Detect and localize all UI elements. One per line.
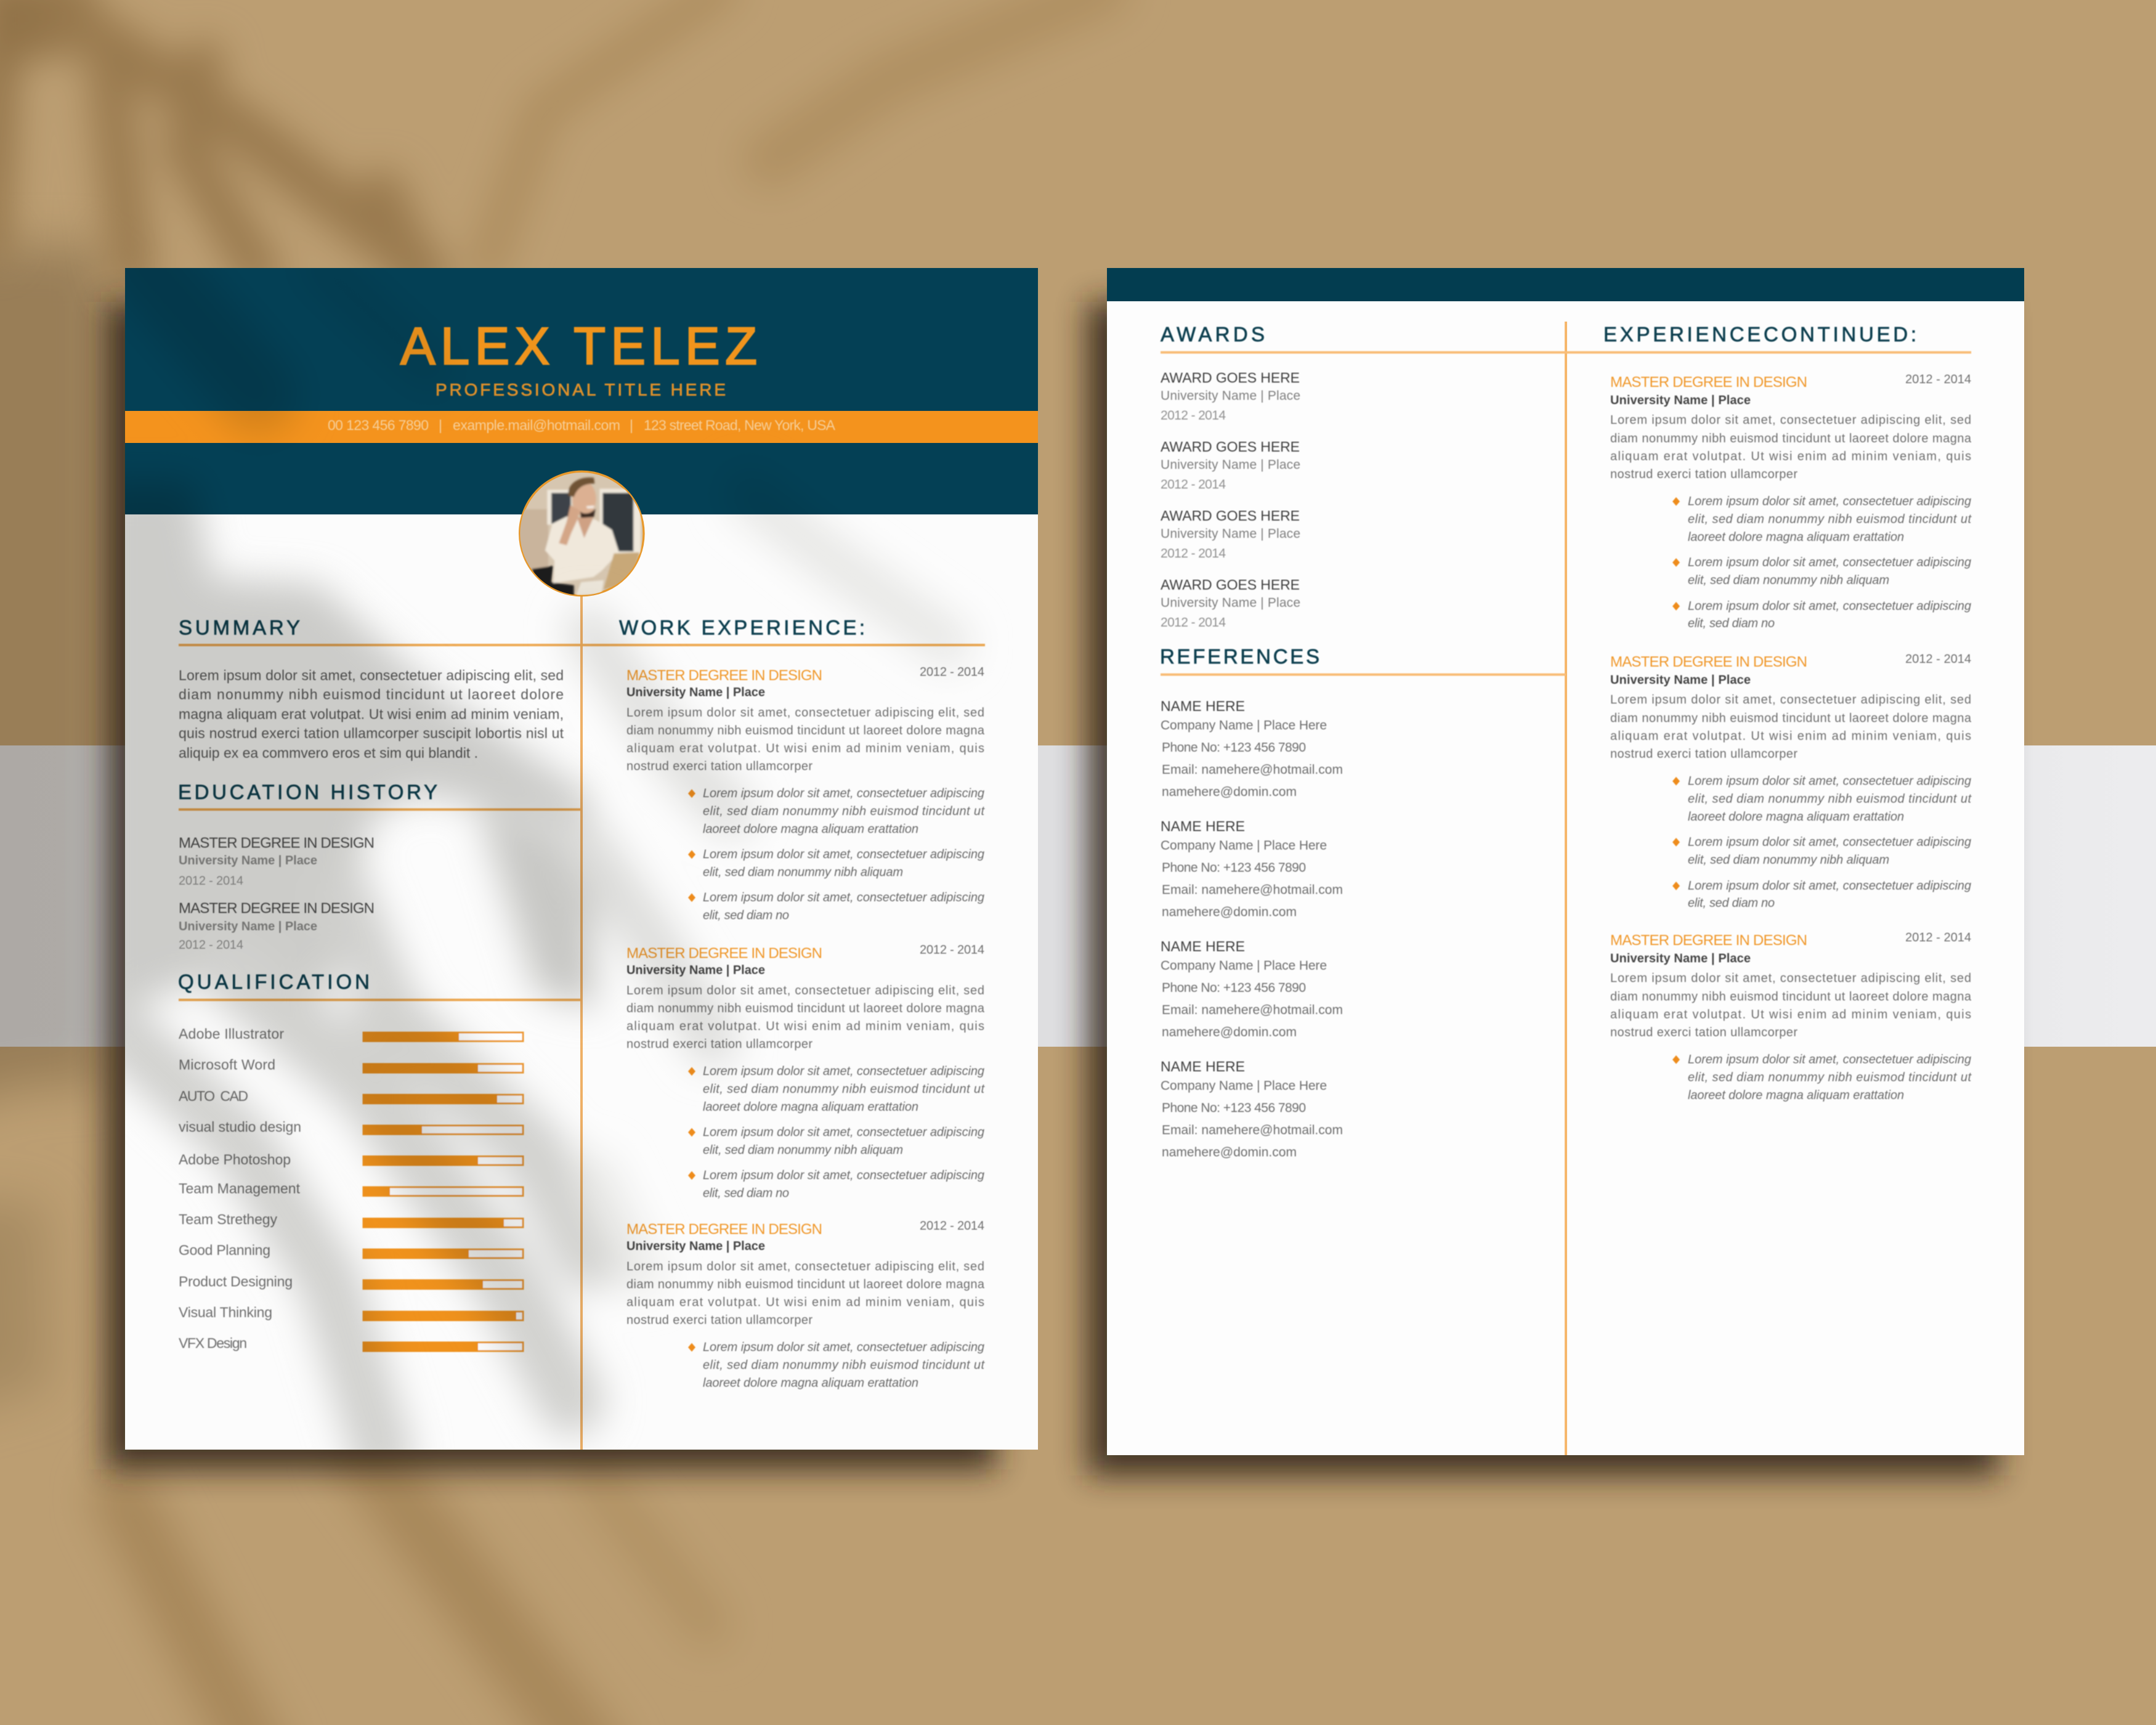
resume page 1: [125, 268, 1038, 1450]
continued job entry 1: aliquam erat volutpat. Ut wisi enim ad minim veniam, quis: [1610, 450, 1971, 463]
page 2 centre divider: [1565, 322, 1567, 1455]
job entry 3: nostrud exerci tation ullamcorper: [626, 1313, 813, 1327]
reference 3: Company Name | Place Here: [1161, 959, 1327, 973]
rule under qualification: [179, 999, 582, 1001]
continued job entry 1: diam nonummy nibh euismod tincidunt ut laoreet dolore magna: [1610, 432, 1972, 445]
award entry 4: [1161, 577, 1300, 630]
reference 2: [1161, 818, 1343, 919]
reference 1: NAME HERE: [1161, 698, 1245, 714]
reference 4: namehere@domin.com: [1162, 1145, 1297, 1159]
skill labels: Good Planning: [179, 1242, 270, 1258]
continued job entry 3: aliquam erat volutpat. Ut wisi enim ad minim veniam, quis: [1610, 1008, 1971, 1021]
continued job entry 2: elit, sed diam nonummy nibh aliquam: [1688, 853, 1889, 867]
name title: ALEX TELEZ: [400, 317, 757, 376]
heading: awards: AWARDS: [1161, 323, 1265, 346]
reference 3: namehere@domin.com: [1162, 1025, 1297, 1039]
job entry 2: diam nonummy nibh euismod tincidunt ut laoreet dolore magna: [626, 1002, 985, 1015]
job entry 3: University Name | Place: [626, 1240, 765, 1253]
reference 3: NAME HERE: [1161, 938, 1245, 954]
continued job entry 3: diam nonummy nibh euismod tincidunt ut laoreet dolore magna: [1610, 990, 1972, 1004]
continued job entry 3: University Name | Place: [1610, 952, 1751, 965]
reference 2: Phone No: +123 456 7890: [1162, 861, 1306, 875]
continued job entry 2: nostrud exerci tation ullamcorper: [1610, 747, 1797, 761]
contact details: 00 123 456 7890: [328, 417, 429, 433]
reference 1: namehere@domin.com: [1162, 785, 1297, 799]
job entry 2: elit, sed diam nonummy nibh aliquam: [703, 1143, 903, 1157]
summary text: diam nonummy nibh euismod tincidunt ut laoreet dolore: [179, 686, 564, 702]
skill labels: visual studio design: [179, 1119, 301, 1135]
job entry 2: aliquam erat volutpat. Ut wisi enim ad minim veniam, quis: [626, 1020, 984, 1033]
award entry 1: AWARD GOES HERE: [1161, 370, 1300, 386]
award entry 2: AWARD GOES HERE: [1161, 439, 1300, 455]
award entry 3: AWARD GOES HERE: [1161, 508, 1300, 524]
job entry 1: elit, sed diam no: [703, 909, 789, 922]
reference 4: Company Name | Place Here: [1161, 1079, 1327, 1093]
resume page 2: [1107, 268, 2024, 1455]
continued job entry 3: Lorem ipsum dolor sit amet, consectetuer adipiscing elit, sed: [1610, 972, 1971, 985]
job entry 1: Lorem ipsum dolor sit amet, consectetuer adipiscing: [703, 891, 984, 904]
page 1 navy header: [125, 268, 1038, 514]
job entry 3: [626, 1219, 985, 1390]
page 2 navy header strip: [1107, 268, 2024, 301]
drop shadow: right page: [1087, 302, 1999, 1475]
award entry 4: 2012 - 2014: [1161, 615, 1226, 630]
skill labels: Team Strethegy: [179, 1211, 277, 1227]
continued job entry 2: diam nonummy nibh euismod tincidunt ut laoreet dolore magna: [1610, 712, 1972, 725]
job entry 2: 2012 - 2014: [920, 943, 984, 957]
heading: summary: SUMMARY: [179, 616, 300, 639]
education entries: 2012 - 2014: [179, 938, 243, 952]
job entry 1: nostrud exerci tation ullamcorper: [626, 760, 813, 773]
award entry 3: University Name | Place: [1161, 527, 1300, 541]
job entry 2: laoreet dolore magna aliquam erattation: [703, 1100, 918, 1114]
reference 1: [1161, 698, 1343, 799]
job entry 1: MASTER DEGREE IN DESIGN: [626, 667, 822, 684]
continued job entry 3: MASTER DEGREE IN DESIGN: [1610, 932, 1807, 949]
continued job entry 3: elit, sed diam nonummy nibh euismod tincidunt ut: [1688, 1071, 1972, 1084]
skill labels: Adobe Illustrator: [179, 1026, 284, 1042]
reference 3: Phone No: +123 456 7890: [1162, 981, 1306, 995]
leaf shadows falling across the pages: [94, 259, 949, 1454]
profile photo: [517, 471, 644, 598]
contact details: |: [439, 417, 442, 433]
job entry 2: Lorem ipsum dolor sit amet, consectetuer adipiscing elit, sed: [626, 984, 984, 997]
rule under references: [1161, 673, 1566, 676]
award entry 3: 2012 - 2014: [1161, 546, 1226, 561]
reference 1: Email: namehere@hotmail.com: [1162, 763, 1343, 777]
contact details: 123 street Road, New York, USA: [644, 417, 836, 433]
continued job entry 1: Lorem ipsum dolor sit amet, consectetuer adipiscing: [1688, 599, 1971, 613]
continued job entry 3: Lorem ipsum dolor sit amet, consectetuer adipiscing: [1688, 1053, 1971, 1066]
job entry 3: elit, sed diam nonummy nibh euismod tincidunt ut: [703, 1358, 985, 1372]
skill labels: Product Designing: [179, 1273, 293, 1289]
job entry 1: [626, 665, 985, 922]
award entry 4: University Name | Place: [1161, 596, 1300, 610]
continued job entry 2: laoreet dolore magna aliquam erattation: [1688, 810, 1904, 824]
reference 2: Email: namehere@hotmail.com: [1162, 883, 1343, 897]
job entry 2: Lorem ipsum dolor sit amet, consectetuer adipiscing: [703, 1169, 984, 1182]
reference 4: Phone No: +123 456 7890: [1162, 1101, 1306, 1115]
continued job entry 2: Lorem ipsum dolor sit amet, consectetuer adipiscing: [1688, 774, 1971, 788]
summary text: [179, 667, 564, 761]
job entry 3: diam nonummy nibh euismod tincidunt ut laoreet dolore magna: [626, 1278, 985, 1291]
job entry 1: Lorem ipsum dolor sit amet, consectetuer adipiscing elit, sed: [626, 706, 984, 720]
continued job entry 2: elit, sed diam no: [1688, 896, 1775, 910]
reference 1: Phone No: +123 456 7890: [1162, 741, 1306, 755]
job entry 2: nostrud exerci tation ullamcorper: [626, 1037, 813, 1051]
skill bars chart: [363, 1032, 523, 1352]
skill labels: Adobe Photoshop: [179, 1151, 291, 1167]
leaf shadows on background: [0, 0, 1103, 1725]
professional title: PROFESSIONAL TITLE HERE: [436, 380, 726, 399]
heading: experience continued: EXPERIENCECONTINUED:: [1603, 323, 1916, 346]
continued job entry 2: Lorem ipsum dolor sit amet, consectetuer adipiscing: [1688, 835, 1971, 849]
award entry 2: 2012 - 2014: [1161, 477, 1226, 492]
reference 3: Email: namehere@hotmail.com: [1162, 1003, 1343, 1017]
page 2 paper: [1107, 268, 2024, 1455]
award entry 4: AWARD GOES HERE: [1161, 577, 1300, 593]
education entries: University Name | Place: [179, 920, 317, 933]
job entry 2: Lorem ipsum dolor sit amet, consectetuer adipiscing: [703, 1065, 984, 1078]
job entry 1: diam nonummy nibh euismod tincidunt ut laoreet dolore magna: [626, 724, 985, 737]
skill labels: Visual Thinking: [179, 1304, 272, 1320]
rule under summary and work experience: [179, 644, 985, 646]
job entry 1: elit, sed diam nonummy nibh euismod tincidunt ut: [703, 805, 985, 818]
continued job entry 1: University Name | Place: [1610, 394, 1751, 407]
continued job entry 3: laoreet dolore magna aliquam erattation: [1688, 1089, 1904, 1102]
summary text: Lorem ipsum dolor sit amet, consectetuer adipiscing elit, sed: [179, 667, 564, 683]
education entries: 2012 - 2014: [179, 874, 243, 888]
continued job entry 1: 2012 - 2014: [1905, 373, 1971, 386]
reference 3: [1161, 938, 1343, 1039]
skill labels: Team Management: [179, 1180, 301, 1196]
rule under awards and experience: [1161, 351, 1971, 354]
job entry 1: University Name | Place: [626, 686, 765, 699]
education entries: [179, 835, 375, 952]
contact details: [328, 417, 836, 433]
page 2 text contents: [1160, 323, 1972, 1159]
summary text: aliquip ex ea commvero eros et sim qui blandit .: [179, 745, 478, 761]
education entries: University Name | Place: [179, 854, 317, 867]
award entry 2: [1161, 439, 1300, 492]
continued job entry 3: 2012 - 2014: [1905, 931, 1971, 944]
job entry 1: Lorem ipsum dolor sit amet, consectetuer adipiscing: [703, 787, 984, 800]
job entry 1: Lorem ipsum dolor sit amet, consectetuer adipiscing: [703, 848, 984, 861]
job entry 2: Lorem ipsum dolor sit amet, consectetuer adipiscing: [703, 1126, 984, 1139]
education entries: MASTER DEGREE IN DESIGN: [179, 900, 375, 917]
heading: work experience: WORK EXPERIENCE:: [619, 616, 865, 639]
heading: education history: EDUCATION HISTORY: [178, 781, 437, 803]
contact details: |: [630, 417, 633, 433]
contact details: example.mail@hotmail.com: [453, 417, 620, 433]
award entry 1: [1161, 370, 1300, 423]
continued job entry 2: MASTER DEGREE IN DESIGN: [1610, 654, 1807, 670]
continued job entry 2: Lorem ipsum dolor sit amet, consectetuer adipiscing elit, sed: [1610, 693, 1971, 707]
page 1 centre divider: [580, 591, 583, 1450]
white horizontal band behind pages: [0, 745, 2156, 1047]
job entry 2: University Name | Place: [626, 964, 765, 977]
continued job entry 1: elit, sed diam nonummy nibh euismod tincidunt ut: [1688, 513, 1972, 526]
continued job entry 1: elit, sed diam nonummy nibh aliquam: [1688, 574, 1889, 587]
skill labels: AUTO CAD: [179, 1088, 248, 1104]
continued job entry 1: Lorem ipsum dolor sit amet, consectetuer adipiscing elit, sed: [1610, 413, 1971, 427]
continued job entry 1: nostrud exerci tation ullamcorper: [1610, 468, 1797, 481]
job entry 3: MASTER DEGREE IN DESIGN: [626, 1221, 822, 1238]
continued job entry 1: [1610, 373, 1972, 630]
summary text: quis nostrud exerci tation ullamcorper suscipit lobortis nisl ut: [179, 725, 564, 741]
continued job entry 1: MASTER DEGREE IN DESIGN: [1610, 374, 1807, 391]
job entry 1: elit, sed diam nonummy nibh aliquam: [703, 866, 903, 879]
skill labels: VFX Design: [179, 1335, 247, 1351]
skill labels: [179, 1026, 301, 1351]
orange contact bar: [125, 411, 1038, 443]
continued job entry 2: [1610, 652, 1972, 910]
continued job entry 3: nostrud exerci tation ullamcorper: [1610, 1026, 1797, 1039]
continued job entry 3: [1610, 931, 1972, 1102]
continued job entry 1: Lorem ipsum dolor sit amet, consectetuer adipiscing: [1688, 556, 1971, 569]
job entry 3: 2012 - 2014: [920, 1219, 984, 1233]
job entry 3: aliquam erat volutpat. Ut wisi enim ad minim veniam, quis: [626, 1296, 984, 1309]
page 1 paper: [125, 268, 1038, 1450]
continued job entry 1: elit, sed diam no: [1688, 617, 1775, 630]
job entry 3: Lorem ipsum dolor sit amet, consectetuer adipiscing: [703, 1341, 984, 1354]
reference 4: NAME HERE: [1161, 1058, 1245, 1074]
skill labels: Microsoft Word: [179, 1057, 275, 1073]
job entry 2: MASTER DEGREE IN DESIGN: [626, 945, 822, 962]
drop shadow: left page: [106, 302, 996, 1469]
award entry 2: University Name | Place: [1161, 458, 1300, 472]
award entry 1: 2012 - 2014: [1161, 408, 1226, 423]
continued job entry 2: Lorem ipsum dolor sit amet, consectetuer adipiscing: [1688, 879, 1971, 893]
job entry 2: elit, sed diam nonummy nibh euismod tincidunt ut: [703, 1082, 985, 1096]
reference 1: Company Name | Place Here: [1161, 718, 1327, 733]
heading: qualification: QUALIFICATION: [178, 970, 370, 993]
job entry 2: [626, 943, 985, 1200]
summary text: magna aliquam erat volutpat. Ut wisi enim ad minim veniam,: [179, 706, 564, 722]
continued job entry 2: University Name | Place: [1610, 673, 1751, 687]
job entry 2: elit, sed diam no: [703, 1187, 789, 1200]
reference 4: [1161, 1058, 1343, 1159]
continued job entry 2: aliquam erat volutpat. Ut wisi enim ad minim veniam, quis: [1610, 729, 1971, 743]
job entry 1: 2012 - 2014: [920, 665, 984, 679]
job entry 1: laoreet dolore magna aliquam erattation: [703, 822, 918, 836]
heading: references: REFERENCES: [1160, 645, 1319, 668]
continued job entry 1: Lorem ipsum dolor sit amet, consectetuer adipiscing: [1688, 495, 1971, 508]
job entry 1: aliquam erat volutpat. Ut wisi enim ad minim veniam, quis: [626, 742, 984, 755]
job entry 3: laoreet dolore magna aliquam erattation: [703, 1376, 918, 1390]
job entry 3: Lorem ipsum dolor sit amet, consectetuer adipiscing elit, sed: [626, 1260, 984, 1273]
page 1 text and chart contents: [178, 317, 985, 1390]
reference 2: Company Name | Place Here: [1161, 838, 1327, 853]
continued job entry 2: elit, sed diam nonummy nibh euismod tincidunt ut: [1688, 792, 1972, 806]
continued job entry 1: laoreet dolore magna aliquam erattation: [1688, 530, 1904, 544]
rule under education: [179, 808, 582, 811]
reference 2: namehere@domin.com: [1162, 905, 1297, 919]
award entry 1: University Name | Place: [1161, 389, 1300, 403]
reference 2: NAME HERE: [1161, 818, 1245, 834]
education entries: MASTER DEGREE IN DESIGN: [179, 835, 375, 851]
reference 4: Email: namehere@hotmail.com: [1162, 1123, 1343, 1137]
continued job entry 2: 2012 - 2014: [1905, 652, 1971, 666]
award entry 3: [1161, 508, 1300, 561]
